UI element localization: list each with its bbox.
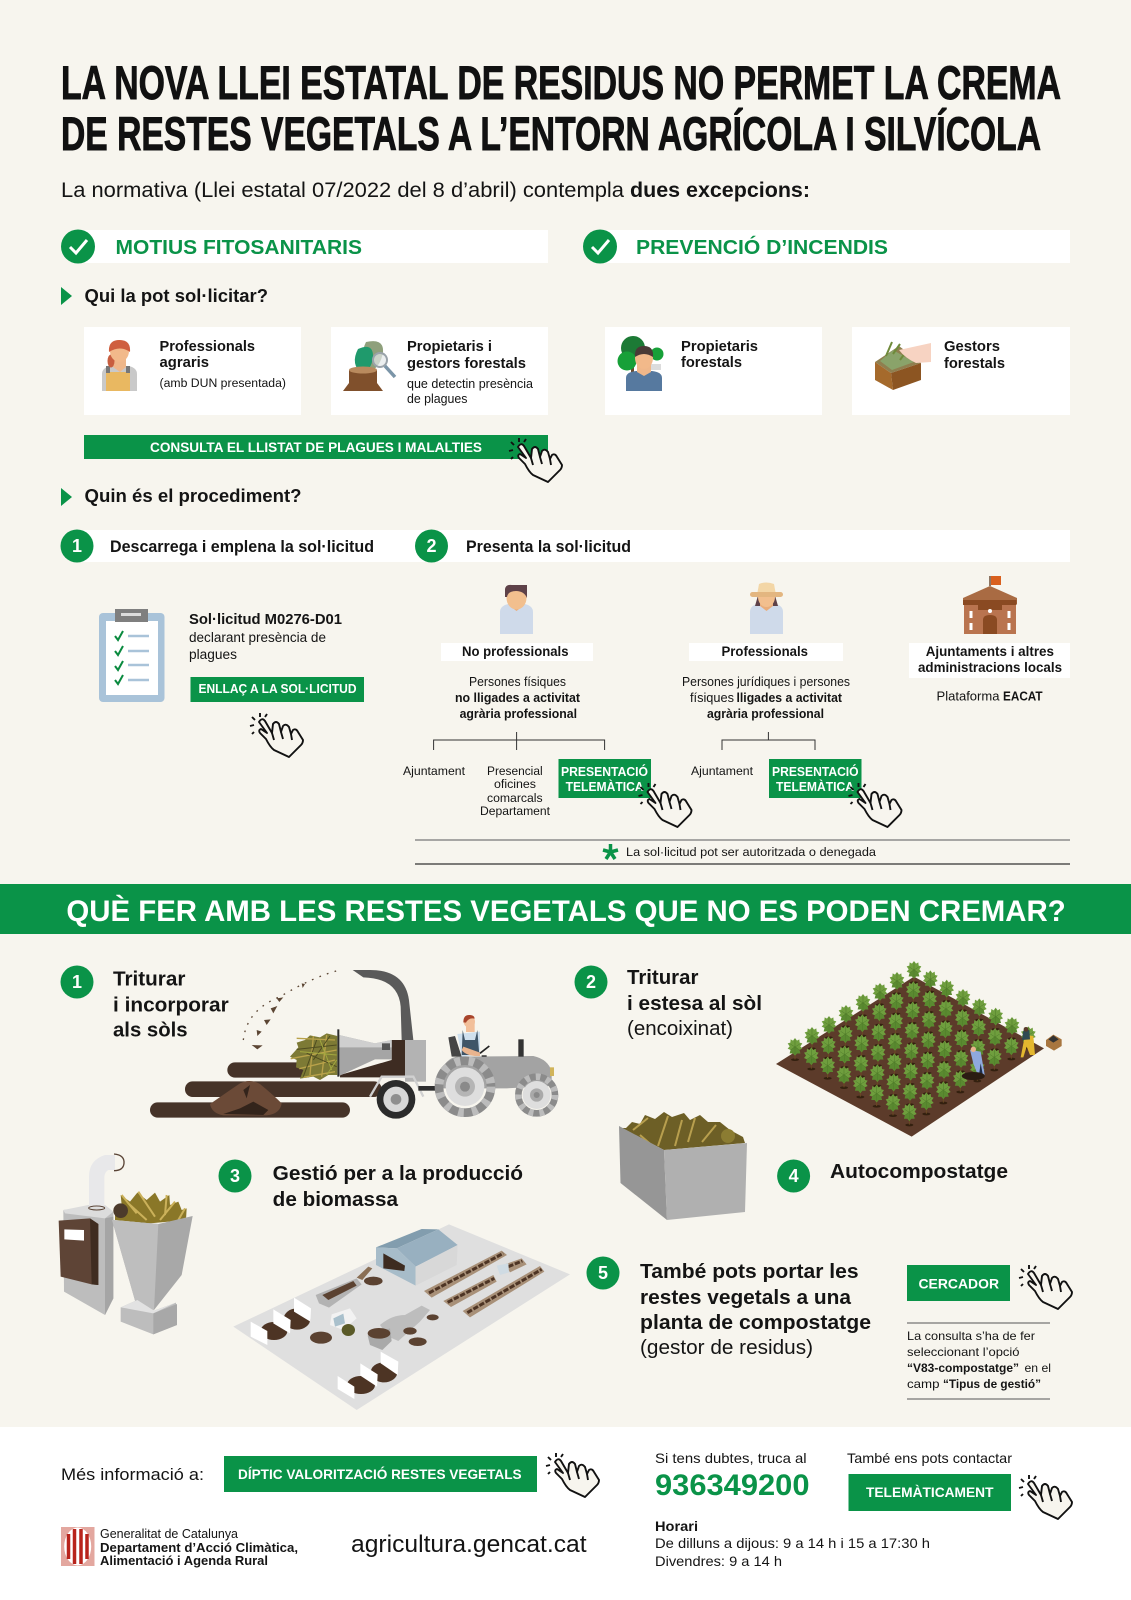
phone block: Si tens dubtes, truca al (655, 1450, 807, 1466)
card: propietaris i gestors forestals: de plagues (407, 392, 468, 406)
logo: generalitat (61, 1527, 94, 1566)
note: consulta: “V83-compostatge” (907, 1361, 1019, 1375)
option 2: triturar i estesa al sòl: i estesa al sòl (627, 992, 762, 1015)
options: no professionals (403, 764, 551, 818)
icon: pointer hand (546, 1453, 599, 1497)
button: consulta el llistat (84, 435, 548, 459)
text: department: Departament d’Acció Climàtica, (100, 1541, 298, 1555)
shed (376, 1229, 458, 1286)
intro text: dues excepcions: (630, 179, 810, 202)
diagram: professionals branches (722, 732, 815, 750)
options: no professionals: oficines (494, 777, 536, 791)
icon: pointer hand (509, 438, 562, 482)
text: sol·licitud M0276-D01 (189, 612, 342, 662)
text: department: Alimentació i Agenda Rural (100, 1554, 268, 1568)
banner: què fer amb les restes vegetals: QUÈ FER AMB LES RESTES VEGETALS QUE NO ES PODEN CREMAR? (66, 894, 1066, 928)
option 5: planta de compostatge: restes vegetals a una (640, 1286, 852, 1309)
text: professionals description (682, 675, 850, 721)
label: ajuntaments: administracions locals (918, 660, 1062, 675)
card: propietaris i gestors forestals (331, 327, 548, 415)
diagram: no professionals branches (434, 732, 605, 750)
button: cercador (907, 1265, 1010, 1301)
label: professionals: Professionals (722, 644, 808, 659)
button: presentació telemàtica (558, 759, 651, 798)
option 3: biomassa: de biomassa (273, 1188, 399, 1211)
text: professionals description: físiques (690, 691, 734, 705)
card: propietaris forestals (605, 327, 822, 415)
note: consulta: camp (907, 1377, 940, 1391)
panel: prevenció d'incendis header (583, 230, 1070, 264)
card: professionals agraris (84, 327, 301, 415)
note: consulta: seleccionant l’opció (907, 1345, 1020, 1359)
icon: soil box with hand (875, 342, 931, 390)
button: presentació telemàtica: PRESENTACIÓ (561, 764, 648, 779)
icon: pointer hand (1019, 1475, 1072, 1519)
text: professionals description: lligades a activitat (736, 691, 843, 705)
compost bins (251, 1298, 398, 1399)
text: sol·licitud M0276-D01: Sol·licitud M0276-D01 (189, 612, 342, 628)
text: no professionals description: Persones físiques (469, 675, 566, 689)
option 2: triturar i estesa al sòl: (encoixinat) (627, 1017, 733, 1040)
option 3: biomassa: Gestió per a la producció (273, 1162, 523, 1185)
option 3: biomassa (218, 1160, 523, 1211)
button: presentació telemàtica: TELEMÀTICA (566, 779, 644, 794)
options: no professionals: Departament (480, 804, 551, 818)
text: no professionals description: agrària professional (460, 707, 577, 721)
icon: clipboard (99, 609, 164, 702)
icon: town hall (963, 576, 1017, 634)
button: consulta el llistat: CONSULTA EL LLISTAT DE PLAGUES I MALALTIES (150, 440, 482, 455)
option 5: planta de compostatge: planta de compostatge (640, 1311, 871, 1334)
card: propietaris forestals: Propietaris (681, 338, 758, 355)
label: ajuntaments (909, 643, 1070, 678)
schedule: Divendres: 9 a 14 h (655, 1553, 782, 1569)
option: ajuntament: Ajuntament (691, 764, 754, 778)
icon: pointer hand (638, 783, 692, 827)
panel: step headers: Presenta la sol·licitud (466, 538, 631, 556)
card: professionals agraris: (amb DUN presentada) (160, 378, 286, 390)
text: plataforma eacat (936, 690, 1043, 704)
icon: woman with hat (750, 582, 783, 634)
heading: quin és el procediment: Quin és el procediment? (84, 486, 302, 506)
option 5: planta de compostatge: També pots portar les (640, 1260, 859, 1283)
option 1: triturar i incorporar: 1 (72, 972, 82, 992)
note: consulta: en el (1024, 1361, 1051, 1375)
option 4: autocompostatge (777, 1160, 1008, 1192)
card: gestors forestals: Gestors (944, 338, 1000, 355)
button: díptic: DÍPTIC VALORITZACIÓ RESTES VEGETALS (238, 1467, 522, 1482)
label: no professionals (441, 643, 593, 661)
button: presentació telemàtica: TELEMÀTICA (776, 779, 855, 794)
loader and machinery (310, 1306, 439, 1350)
option 5: planta de compostatge (586, 1256, 871, 1359)
text: plataforma eacat: EACAT (1003, 690, 1043, 704)
phone block (655, 1450, 810, 1502)
phone block: 936349200 (655, 1469, 810, 1502)
card: propietaris i gestors forestals: gestors forestals (407, 355, 526, 372)
icon: pointer hand (250, 713, 303, 757)
note: consulta: “Tipus de gestió” (943, 1377, 1041, 1391)
icon: forest owner (618, 336, 664, 391)
text: professionals description: Persones jurídiques i persones (682, 675, 850, 689)
screening machine (316, 1267, 383, 1308)
icon: man (500, 585, 533, 634)
contact block (847, 1450, 1012, 1511)
button: presentació telemàtica (769, 759, 862, 798)
options: no professionals: comarcals (487, 791, 543, 805)
button: cercador: CERCADOR (918, 1276, 999, 1292)
illustration: biomass boiler (59, 1154, 193, 1334)
text: department (100, 1527, 298, 1568)
banner: què fer amb les restes vegetals (0, 884, 1131, 934)
option 1: triturar i incorporar: Triturar (113, 968, 185, 991)
illustration: tractor with chipper (150, 970, 555, 1119)
option 1: triturar i incorporar (60, 966, 229, 1042)
text: professionals description: agrària professional (707, 707, 824, 721)
text: department: Generalitat de Catalunya (100, 1527, 238, 1541)
panel: step headers: 2 (426, 536, 437, 556)
card: gestors forestals: forestals (944, 355, 1005, 372)
option 3: biomassa: 3 (230, 1166, 240, 1186)
button: presentació telemàtica: PRESENTACIÓ (772, 764, 859, 779)
text: sol·licitud M0276-D01: declarant presència de (189, 630, 326, 645)
option 4: autocompostatge: Autocompostatge (830, 1160, 1008, 1183)
label: ajuntaments: Ajuntaments i altres (926, 644, 1054, 659)
panel: step headers (60, 530, 1070, 562)
icon: pointer hand (1019, 1265, 1072, 1309)
note: consulta (907, 1323, 1051, 1399)
footer background (0, 1427, 1131, 1600)
illustration: composting plant (233, 1224, 570, 1410)
schedule: Horari (655, 1518, 698, 1534)
button: enllaç a la sol·licitud (190, 677, 364, 702)
options: no professionals: Ajuntament (403, 764, 466, 778)
card: propietaris i gestors forestals: que detectin presència (407, 377, 533, 391)
note: authorisation (415, 840, 1070, 864)
text: més informació: Més informació a: (61, 1465, 204, 1484)
card: professionals agraris: Professionals (160, 338, 255, 355)
panel: prevenció d'incendis header: PREVENCIÓ D’INCENDIS (636, 235, 888, 259)
panel: motius fitosanitaris header: MOTIUS FITOSANITARIS (116, 237, 362, 259)
panel: step headers: 1 (72, 536, 82, 556)
option 2: triturar i estesa al sòl (574, 966, 762, 1040)
illustration: planted field (776, 961, 1062, 1137)
contact block: TELEMÀTICAMENT (866, 1484, 994, 1500)
windrows (424, 1251, 544, 1317)
label: professionals (689, 643, 843, 661)
schedule (655, 1518, 930, 1569)
card: propietaris forestals: forestals (681, 354, 742, 371)
label: no professionals: No professionals (462, 644, 568, 659)
icon: pointer hand (848, 783, 902, 827)
card: gestors forestals (852, 327, 1070, 415)
option 5: planta de compostatge: 5 (598, 1263, 608, 1283)
title (61, 56, 1061, 160)
option 4: autocompostatge: 4 (789, 1166, 799, 1186)
icon: farmer (102, 340, 137, 391)
note: consulta: La consulta s’ha de fer (907, 1329, 1035, 1343)
note: authorisation: La sol·licitud pot ser autoritzada o denegada (626, 845, 876, 859)
heading: qui la pot sol·licitar: Qui la pot sol·licitar? (84, 286, 268, 306)
button: díptic (224, 1456, 537, 1492)
option 2: triturar i estesa al sòl: Triturar (627, 966, 698, 989)
panel: motius fitosanitaris header (61, 230, 548, 264)
icon: tree stump with leaf and magnifier (343, 341, 395, 391)
button: enllaç a la sol·licitud: ENLLAÇ A LA SOL·LICITUD (198, 682, 356, 696)
card: propietaris i gestors forestals: Propietaris i (407, 338, 492, 355)
option 2: triturar i estesa al sòl: 2 (586, 972, 596, 992)
option 5: planta de compostatge: (gestor de residus) (640, 1336, 813, 1359)
intro text: La normativa (Llei estatal 07/2022 del 8 d’abril) contempla (61, 179, 624, 202)
text: plataforma eacat: Plataforma (936, 690, 1000, 704)
illustration: compost box (619, 1112, 747, 1220)
option 1: triturar i incorporar: als sòls (113, 1019, 188, 1042)
panel: step headers: Descarrega i emplena la sol·licitud (110, 538, 374, 556)
option 1: triturar i incorporar: i incorporar (113, 994, 229, 1017)
schedule: De dilluns a dijous: 9 a 14 h i 15 a 17:30 h (655, 1535, 930, 1551)
website: agricultura.gencat.cat (351, 1531, 587, 1558)
card: professionals agraris: agraris (160, 354, 209, 371)
contact block: També ens pots contactar (847, 1450, 1012, 1466)
text: sol·licitud M0276-D01: plagues (189, 647, 237, 662)
options: no professionals: Presencial (487, 764, 543, 778)
text: no professionals description: no lligades a activitat (455, 691, 581, 705)
text: no professionals description (455, 675, 581, 721)
